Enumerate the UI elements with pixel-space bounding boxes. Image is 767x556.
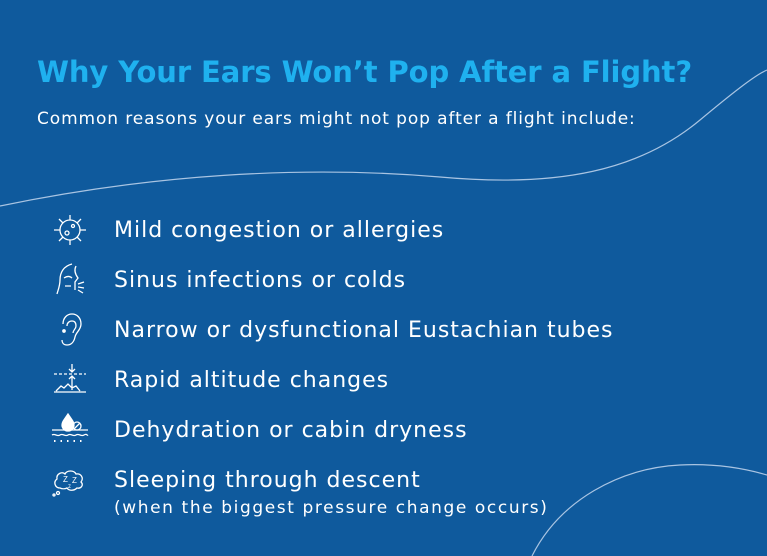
icon: sleep cloud: Z [63, 475, 68, 484]
item 6: (when the biggest pressure change occurs) [114, 498, 548, 518]
icon: sinus [56, 263, 84, 294]
item 5: Dehydration or cabin dryness [114, 418, 468, 443]
icon: sleep cloud [52, 470, 83, 497]
icon: altitude [54, 364, 86, 393]
icon: ear [61, 313, 82, 346]
icon: dehydration [52, 413, 88, 442]
item 4: Rapid altitude changes [114, 368, 389, 393]
icon: sleep cloud: Z [72, 476, 77, 485]
icon: sleep cloud: z [68, 484, 71, 490]
item 2: Sinus infections or colds [114, 268, 406, 293]
item 6: Sleeping through descent [114, 468, 421, 493]
icon: virus [54, 215, 86, 245]
title: Why Your Ears Won’t Pop After a Flight? [37, 55, 692, 89]
item 1: Mild congestion or allergies [114, 218, 444, 243]
item 3: Narrow or dysfunctional Eustachian tubes [114, 318, 614, 343]
item 6 [114, 468, 548, 518]
subtitle: Common reasons your ears might not pop after a flight include: [37, 109, 636, 129]
